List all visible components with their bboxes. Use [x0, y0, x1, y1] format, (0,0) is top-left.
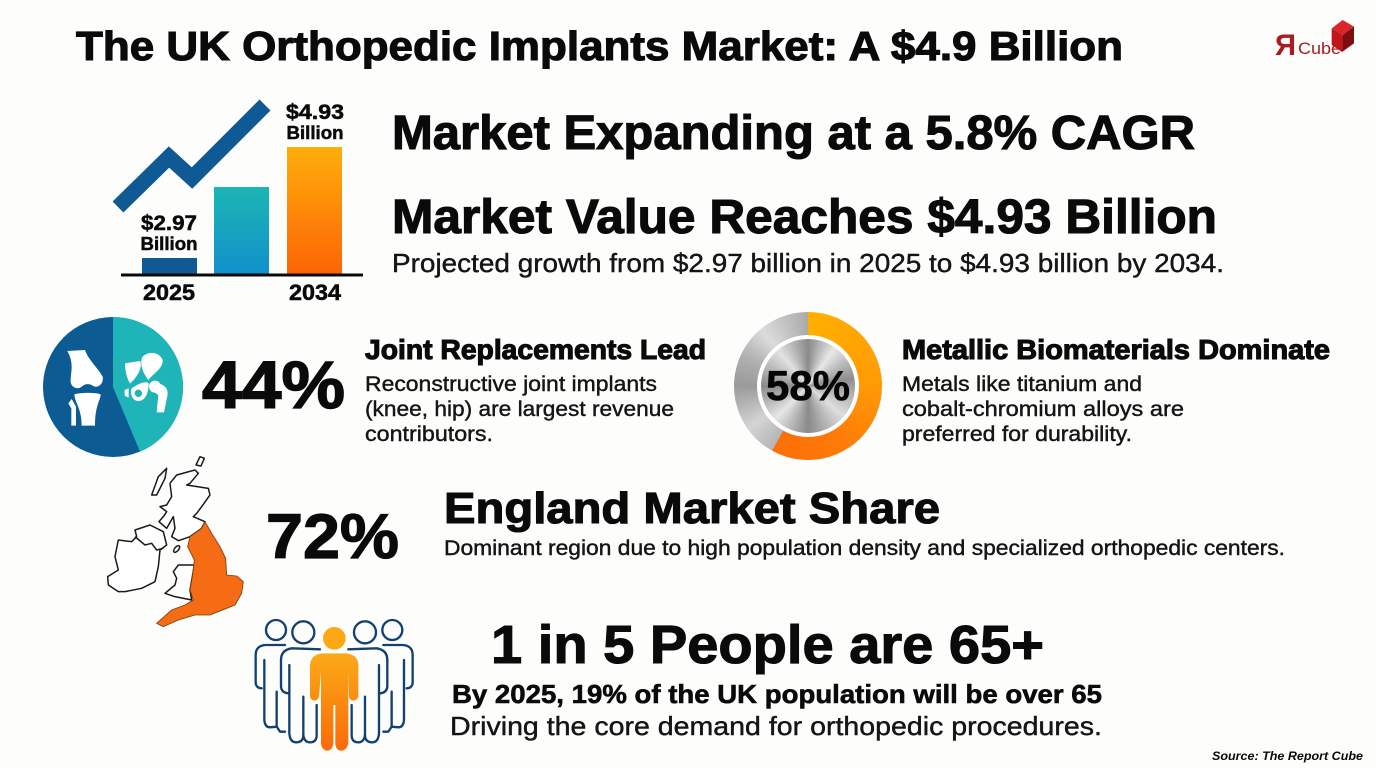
map: England highlighted	[157, 522, 243, 627]
trend line arrow	[118, 105, 265, 207]
bar: 2034	[287, 147, 342, 275]
heading: joint replacements: Joint Replacements Lead	[365, 334, 706, 365]
logo: RCube: Я	[1275, 29, 1296, 62]
person outline: far right	[382, 620, 413, 732]
heading: 1 in 5 people: 1 in 5 People are 65+	[491, 615, 1044, 675]
map: Ireland	[108, 525, 167, 592]
text: joint replacements description: contributors.	[365, 422, 493, 446]
value label: 2025: $2.97	[141, 212, 197, 235]
map: Wales	[165, 565, 194, 600]
bar: 2025	[142, 258, 197, 275]
map: Hebrides	[152, 468, 167, 495]
heading: market value: Market Value Reaches $4.93 Billion	[392, 191, 1217, 244]
text: metallic description: cobalt-chromium alloys are	[902, 397, 1184, 421]
map: Scotland	[159, 470, 210, 541]
text: joint replacements description	[365, 372, 674, 446]
title: The UK Orthopedic Implants Market: A $4.9 Billion	[76, 23, 1123, 69]
text: 19% over 65: By 2025, 19% of the UK population will be over 65	[452, 679, 1102, 709]
logo: RCube	[1275, 20, 1354, 62]
text: projected growth: Projected growth from $2.97 billion in 2025 to $4.93 billion by 2034.	[392, 248, 1224, 278]
unit label: 2025: Billion	[140, 233, 198, 254]
text: metallic description: preferred for durability.	[902, 422, 1132, 446]
map: Orkney	[196, 457, 204, 466]
map: Isle of Man	[173, 545, 181, 553]
heading: CAGR: Market Expanding at a 5.8% CAGR	[392, 107, 1195, 160]
heading: metallic biomaterials: Metallic Biomaterials Dominate	[902, 334, 1330, 365]
icon: group of people	[256, 620, 413, 751]
text: joint replacements description: Reconstructive joint implants	[365, 372, 657, 396]
source note: Source: The Report Cube	[1212, 749, 1363, 763]
axis label: 2025: 2025	[143, 280, 195, 305]
text: metallic description	[902, 372, 1184, 446]
stat: 72%: 72%	[266, 502, 399, 572]
heading: England market share: England Market Share	[444, 484, 940, 533]
icon: UK and Ireland map	[108, 457, 243, 627]
icon: knee bones	[67, 350, 103, 426]
unit label: 2034: Billion	[286, 122, 344, 143]
text: England description: Dominant region due to high population density and specialized orthopedic centers.	[444, 537, 1285, 560]
stat: 44%: 44%	[202, 348, 345, 423]
logo: RCube: Cube	[1298, 39, 1341, 58]
icon: metallic biomaterials donut: 58%	[766, 362, 850, 409]
text: core demand: Driving the core demand for orthopedic procedures.	[450, 711, 1102, 741]
bar: mid period	[214, 187, 269, 275]
axis label: 2034: 2034	[289, 280, 342, 305]
bar chart: market growth	[118, 101, 363, 305]
person outline: inner right	[348, 621, 387, 742]
icon: metallic biomaterials donut	[734, 312, 882, 460]
text: metallic description: Metals like titanium and	[902, 372, 1142, 396]
text: joint replacements description: (knee, hip) are largest revenue	[365, 397, 674, 421]
person outline: far left	[256, 620, 286, 732]
icon: joint replacement pie	[43, 317, 183, 457]
person: highlighted orange	[310, 627, 358, 751]
icon: hip bones	[125, 353, 168, 412]
person outline: inner left	[281, 621, 320, 742]
value label: 2034: $4.93	[286, 101, 344, 124]
